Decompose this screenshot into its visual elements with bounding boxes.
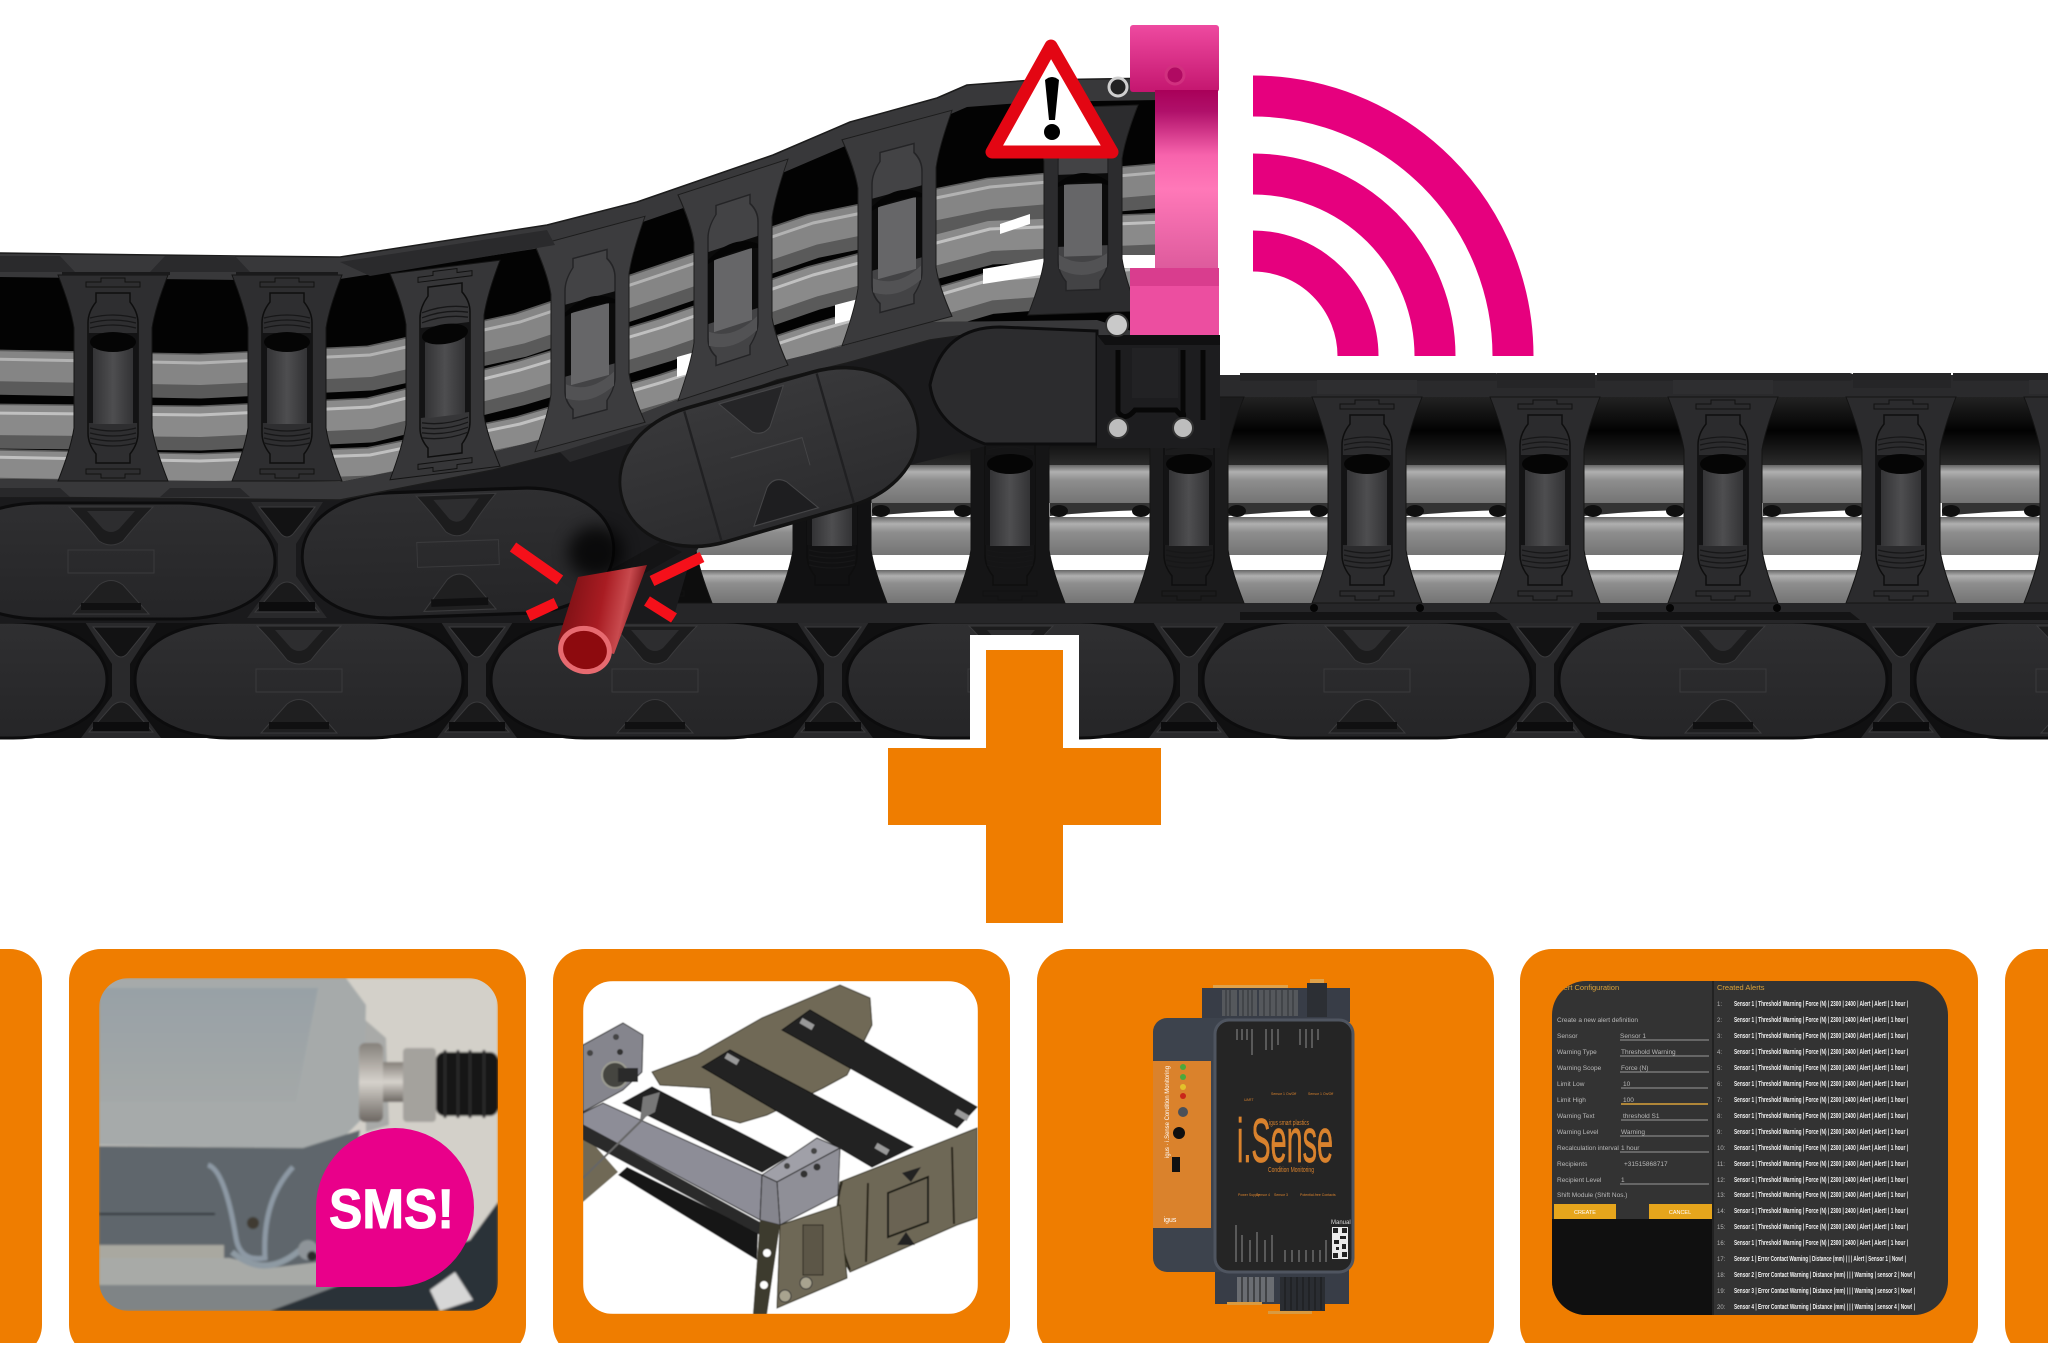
row numbers: 5: [1717,1066,1722,1072]
icon: broken red hose with impact marks [513,526,702,679]
chain end block with screws [1097,78,1220,448]
terminals [1202,988,1350,1022]
form panel: 1 [1621,1177,1625,1184]
created alerts list: Created Alerts [1717,983,1765,992]
created alerts list: Sensor 1 | Threshold Warning | Force (N) | 2300 | 2400 | Alert | Alert! | 1 hour | [1734,1113,1908,1120]
plus sign [888,635,1161,923]
card: SMS connector photo [69,949,526,1357]
created alerts list: Sensor 1 | Threshold Warning | Force (N) | 2300 | 2400 | Alert | Alert! | 1 hour | [1734,1240,1908,1247]
form panel: Recipient Level [1557,1177,1602,1184]
form panel: +31515868717 [1624,1161,1668,1168]
card: alert configuration dashboard [1520,949,1978,1357]
card: alert configuration dashboard: CANCEL [1669,1210,1691,1216]
created alerts list: Sensor 4 | Error Contact Warning | Distance (mm) | | | Warning | sensor 4 | Now! | [1734,1304,1915,1311]
icon: wireless signal arcs [1253,96,1513,356]
form panel: Limit Low [1557,1081,1585,1088]
card: partial right [2005,949,2048,1357]
rail caps [0,230,555,276]
row numbers: 18: [1717,1273,1726,1279]
created alerts list: Sensor 1 | Threshold Warning | Force (N) | 2300 | 2400 | Alert | Alert! | 1 hour | [1734,1192,1908,1199]
created alerts list: Sensor 1 | Threshold Warning | Force (N) | 2300 | 2400 | Alert | Alert! | 1 hour | [1734,1208,1908,1215]
card: i.Sense condition monitoring device: i.Sense [1237,1107,1333,1176]
created alerts list: Sensor 1 | Error Contact Warning | Distance (mm) | | | Alert | Sensor 1 | Now! | [1734,1256,1906,1263]
QR code: Manual [1331,1220,1351,1226]
row numbers: 6: [1717,1082,1722,1088]
form panel: Warning Type [1557,1049,1597,1056]
card: i.Sense condition monitoring device: Power Supply [1238,1193,1260,1197]
row numbers: 11: [1717,1162,1725,1168]
bent upper chain run [0,60,1165,500]
row numbers: 9: [1717,1130,1722,1136]
form panel [1557,983,1676,1199]
row numbers: 2: [1717,1018,1722,1024]
created alerts list: Sensor 3 | Error Contact Warning | Distance (mm) | | | Warning | sensor 3 | Now! | [1734,1288,1915,1295]
form panel: Sensor 1 [1620,1033,1646,1040]
row numbers: 4: [1717,1050,1722,1056]
icon: SMS speech balloon: SMS! [329,1177,454,1240]
card: i.Sense condition monitoring device: Sensor 1 On/Off [1308,1092,1333,1096]
card: alert configuration dashboard: CREATE [1574,1210,1596,1216]
row numbers: 7: [1717,1098,1722,1104]
row numbers: 10: [1717,1146,1726,1152]
form panel: Recalculation interval [1557,1145,1619,1152]
row numbers: 8: [1717,1114,1722,1120]
tilted side plates of bent chain [603,327,1097,576]
created alerts list: Sensor 1 | Threshold Warning | Force (N) | 2300 | 2400 | Alert | Alert! | 1 hour | [1734,1129,1908,1136]
created alerts list: Sensor 1 | Threshold Warning | Force (N) | 2300 | 2400 | Alert | Alert! | 1 hour | [1734,1145,1908,1152]
form panel: Warning Level [1557,1129,1599,1136]
form panel: 10 [1623,1081,1631,1088]
form panel: 1 hour [1621,1145,1640,1152]
form panel: 100 [1623,1097,1634,1104]
row numbers: 1: [1717,1002,1722,1008]
form panel: Force (N) [1621,1065,1648,1072]
form panel: Create a new alert definition [1557,1017,1638,1024]
card: i.Sense condition monitoring device: igus · i.Sense Condition Monitoring [1164,1066,1171,1158]
card: i.Sense condition monitoring device: igus [1164,1217,1177,1224]
form panel: Alert Configuration [1557,983,1619,992]
card: i.Sense condition monitoring device: UART [1244,1098,1254,1102]
card: i.Sense condition monitoring device: Condition Monitoring [1268,1165,1314,1174]
row numbers: 20: [1717,1305,1726,1311]
row numbers [1717,1002,1726,1311]
form panel: Recipients [1557,1161,1588,1168]
card: i.Sense condition monitoring device: Sensor 1 On/Off [1271,1092,1296,1096]
cables inside bent chain [0,100,1155,482]
card: i.Sense condition monitoring device [1037,949,1494,1357]
buttons [1554,1204,1616,1219]
card: i.Sense condition monitoring device: Sensor 3 [1274,1193,1288,1197]
created alerts list: Sensor 1 | Threshold Warning | Force (N) | 2300 | 2400 | Alert | Alert! | 1 hour | [1734,1049,1908,1056]
created alerts list [1717,983,1915,1311]
form panel: threshold S1 [1623,1113,1660,1120]
created alerts list: Sensor 1 | Threshold Warning | Force (N) | 2300 | 2400 | Alert | Alert! | 1 hour | [1734,1224,1908,1231]
created alerts list: Sensor 1 | Threshold Warning | Force (N) | 2300 | 2400 | Alert | Alert! | 1 hour | [1734,1097,1908,1104]
row numbers: 3: [1717,1034,1722,1040]
icon: SMS speech balloon [316,1128,474,1287]
row numbers: 14: [1717,1209,1726,1215]
form panel: Warning Scope [1557,1065,1602,1072]
icon: warning triangle [992,46,1112,152]
created alerts list: Sensor 1 | Threshold Warning | Force (N) | 2300 | 2400 | Alert | Alert! | 1 hour | [1734,1017,1908,1024]
card: i.Sense condition monitoring device: Sensor 4 [1256,1193,1270,1197]
card: i.Sense condition monitoring device: Potential-free Contacts [1300,1193,1336,1197]
row numbers: 16: [1717,1241,1726,1247]
card: i.Sense condition monitoring device: igus smart plastics [1269,1120,1309,1127]
row numbers: 17: [1717,1257,1726,1263]
row numbers: 13: [1717,1193,1726,1199]
icon: pink sensor bracket [1130,25,1219,335]
created alerts list: Sensor 1 | Threshold Warning | Force (N) | 2300 | 2400 | Alert | Alert! | 1 hour | [1734,1081,1908,1088]
created alerts list: Sensor 1 | Threshold Warning | Force (N) | 2300 | 2400 | Alert | Alert! | 1 hour | [1734,1033,1908,1040]
form panel: Warning Text [1557,1113,1595,1120]
created alerts list: Sensor 1 | Threshold Warning | Force (N) | 2300 | 2400 | Alert | Alert! | 1 hour | [1734,1177,1908,1184]
dark backing under bent chain [0,335,1010,623]
bottom row of chain side plates [0,621,2048,738]
device housing [1153,1018,1220,1272]
form panel: Limit High [1557,1097,1586,1104]
created alerts list: Sensor 1 | Threshold Warning | Force (N) | 2300 | 2400 | Alert | Alert! | 1 hour | [1734,1065,1908,1072]
row numbers: 19: [1717,1289,1726,1295]
status lights and ports [1180,1064,1186,1070]
created alerts list: Sensor 1 | Threshold Warning | Force (N) | 2300 | 2400 | Alert | Alert! | 1 hour | [1734,1161,1908,1168]
created alerts list: Sensor 2 | Error Contact Warning | Distance (mm) | | | Warning | sensor 2 | Now! | [1734,1272,1915,1279]
form panel: Threshold Warning [1621,1049,1676,1056]
form panel: Warning [1621,1129,1645,1136]
row numbers: 15: [1717,1225,1726,1231]
form panel: Sensor [1557,1033,1578,1040]
card: CAD drawing of chain link with sensor [553,949,1010,1357]
straight chain with cables, right side [602,373,2048,623]
row of orange cards [0,949,2048,1357]
card: partial left [0,949,42,1357]
created alerts list: Sensor 1 | Threshold Warning | Force (N) | 2300 | 2400 | Alert | Alert! | 1 hour | [1734,1001,1908,1008]
second row of side plates, left side [0,485,616,621]
row numbers: 12: [1717,1178,1726,1184]
form panel: Shift Module (Shift Nos.) [1557,1192,1627,1199]
